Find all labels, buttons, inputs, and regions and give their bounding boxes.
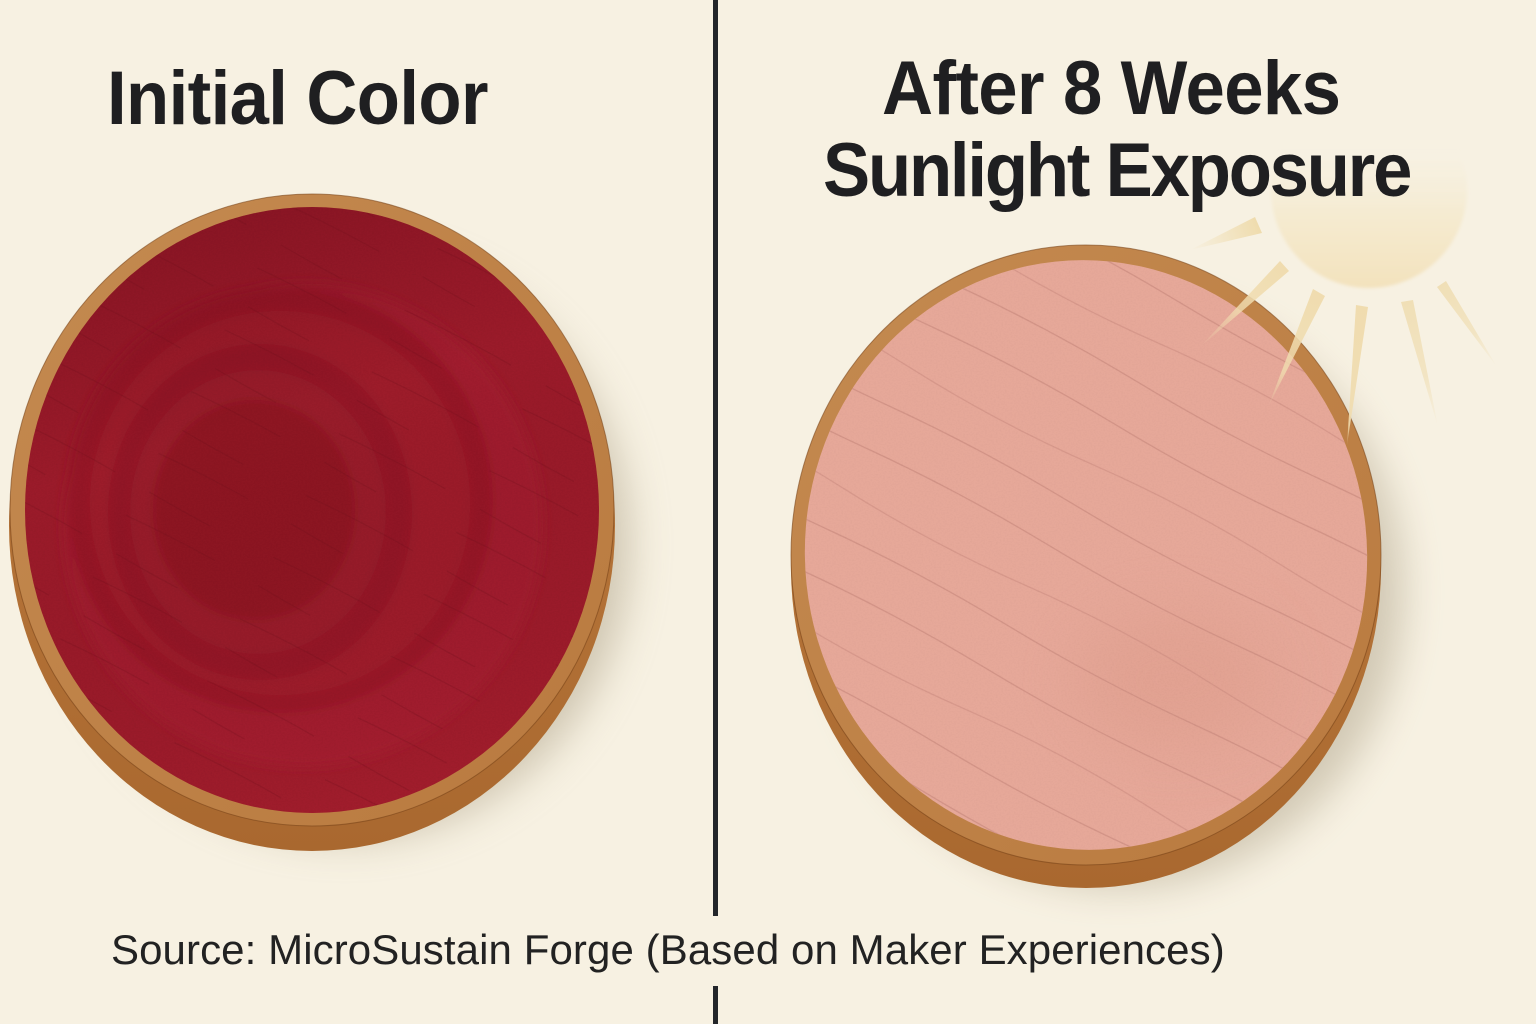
heading line 2: Sunlight Exposure — [823, 128, 1410, 213]
left disc: deep red — [0, 190, 630, 851]
sun disc — [1271, 92, 1467, 288]
divider line — [713, 0, 718, 1024]
source line: Source: MicroSustain Forge (Based on Maker Experiences) — [111, 926, 1225, 973]
sun rays — [1190, 217, 1497, 445]
right disc: faded pink — [776, 232, 1403, 888]
heading: after exposure — [823, 46, 1410, 213]
heading: initial color: Initial Color — [107, 56, 488, 141]
heading line 1: After 8 Weeks — [882, 46, 1340, 131]
